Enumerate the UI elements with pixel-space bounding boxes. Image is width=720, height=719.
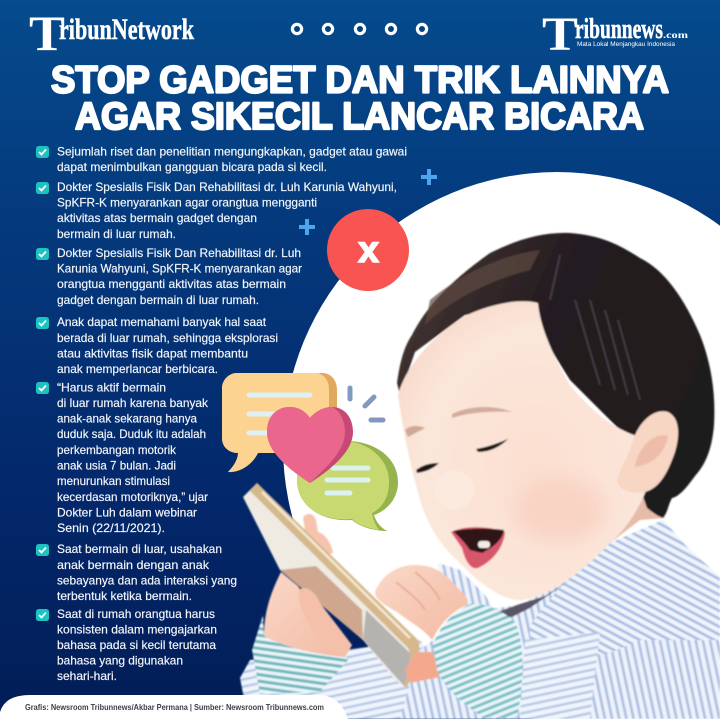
icon: chat bubbles and heart bbox=[222, 373, 398, 531]
bullet: di rumah: sehari-hari. bbox=[57, 669, 117, 683]
mouth lips bbox=[451, 527, 505, 568]
bullet: anak di luar rumah: atau aktivitas fisik dapat membantu bbox=[57, 346, 248, 360]
bullet: dokter spesialis 1: Dokter Spesialis Fisik Dan Rehabilitasi dr. Luh Karunia Wahyuni, bbox=[57, 180, 397, 194]
bullet: kutipan dokter: di luar rumah karena banyak bbox=[57, 396, 209, 410]
bullet: kutipan dokter bbox=[36, 380, 209, 535]
shirt body bbox=[400, 520, 720, 719]
bullet: dokter spesialis 2: Dokter Spesialis Fisik Dan Rehabilitasi dr. Luh bbox=[57, 246, 301, 260]
header dots bbox=[292, 24, 427, 34]
bullet: kutipan dokter: perkembangan motorik bbox=[57, 443, 177, 457]
logo: Tribun Network: T bbox=[29, 5, 65, 61]
orange chat bubble bbox=[222, 373, 337, 472]
bullet: bermain di luar: Saat bermain di luar, usahakan bbox=[57, 542, 222, 556]
right hand bbox=[375, 565, 468, 640]
phone edge highlight bbox=[262, 492, 410, 638]
bullet: dokter spesialis 2 bbox=[36, 246, 302, 307]
bullet: di rumah: bahasa pada si kecil terutama bbox=[57, 638, 216, 652]
logo: Tribunnews.com: ribunnews bbox=[575, 14, 663, 45]
logo: Tribun Network bbox=[29, 5, 194, 61]
bullet: dokter spesialis 1: SpKFR-K menyarankan agar orangtua mengganti bbox=[57, 196, 317, 210]
left sleeve bbox=[252, 615, 348, 694]
phone lower reflection bbox=[363, 610, 412, 687]
brow right bbox=[452, 407, 512, 418]
collar shadow bbox=[497, 580, 570, 617]
logo: Tribunnews.com bbox=[542, 8, 689, 61]
bullet: riset gadget: Sejumlah riset dan penelitian mengungkapkan, gadget atau gawai bbox=[57, 144, 407, 158]
bullet: di rumah: Saat di rumah orangtua harus bbox=[57, 607, 215, 621]
tooth bbox=[478, 541, 490, 548]
bullet: kutipan dokter: menurunkan stimulasi bbox=[57, 474, 170, 488]
lower white fill right of circle bbox=[560, 440, 720, 719]
bullet: dokter spesialis 1: aktivitas atas bermain gadget dengan bbox=[57, 211, 257, 225]
bullet: bermain di luar: terbentuk ketika bermain. bbox=[57, 589, 192, 603]
cheek blush bbox=[515, 478, 605, 542]
bullet: kutipan dokter: duduk saja. Duduk itu adalah bbox=[57, 427, 206, 441]
footer credit tab bbox=[0, 695, 348, 719]
baby photo illustration bbox=[240, 233, 720, 719]
bullet: di rumah: konsisten dalam mengajarkan bbox=[57, 622, 217, 636]
bullet: anak di luar rumah bbox=[36, 315, 278, 376]
brow left bbox=[405, 426, 425, 437]
logo: Tribunnews.com: Mata Lokal Menjangkau Indonesia bbox=[577, 41, 675, 48]
neck shadow bbox=[610, 490, 665, 543]
bullet: riset gadget bbox=[36, 144, 407, 174]
close badge: red circle with x: x bbox=[358, 229, 379, 270]
bullet: anak di luar rumah: Anak dapat memahami banyak hal saat bbox=[57, 315, 267, 329]
logo: Tribunnews.com: .com bbox=[663, 30, 689, 40]
thumb on phone bbox=[299, 588, 352, 657]
hair strands bbox=[550, 255, 640, 400]
bullet: riset gadget: dapat menimbulkan gangguan bicara pada si kecil. bbox=[57, 160, 327, 174]
bullet: dokter spesialis 2: orangtua mengganti aktivitas atas bermain bbox=[57, 277, 286, 291]
inner ear bbox=[635, 435, 668, 467]
bullet: kutipan dokter: Senin (22/11/2021). bbox=[57, 521, 165, 535]
title: AGAR SIKECIL LANCAR BICARA bbox=[75, 96, 644, 138]
icon: plus lower bbox=[299, 219, 315, 235]
hair highlight bbox=[425, 250, 540, 325]
hand holding phone bbox=[264, 572, 352, 657]
right sleeve bbox=[433, 603, 523, 718]
bullet: kutipan dokter: anak usia 7 bulan. Jadi bbox=[57, 458, 176, 472]
white circle behind baby bbox=[283, 172, 720, 719]
close badge: red circle with x bbox=[327, 209, 409, 291]
green chat bubble bbox=[297, 441, 398, 531]
bullet: dokter spesialis 2: gadget dengan bermain di luar rumah. bbox=[57, 293, 259, 307]
shirt lower folds bbox=[520, 632, 600, 719]
fingers under phone bbox=[405, 652, 440, 683]
shirt shoulder bbox=[530, 520, 720, 655]
finger creases bbox=[396, 572, 440, 610]
mouth interior bbox=[453, 529, 504, 553]
icon: plus upper bbox=[421, 169, 437, 185]
bullet: di rumah bbox=[36, 607, 217, 683]
bullet: bermain di luar: anak bermain dengan anak bbox=[57, 558, 210, 572]
bullet: dokter spesialis 1: bermain di luar rumah. bbox=[57, 227, 176, 241]
phone bbox=[243, 483, 419, 687]
left arm underlay bbox=[240, 640, 480, 719]
bullet: anak di luar rumah: anak memperlancar berbicara. bbox=[57, 362, 218, 376]
bullet: kutipan dokter: Dokter Luh dalam webinar bbox=[57, 506, 197, 520]
bullet: bermain di luar bbox=[36, 542, 237, 603]
logo: Tribunnews.com: T bbox=[542, 8, 578, 61]
spark ticks bbox=[350, 388, 383, 420]
shirt patch beside chin bbox=[438, 563, 497, 615]
bullet: bermain di luar: sebayanya dan ada interaksi yang bbox=[57, 574, 237, 588]
title bbox=[51, 60, 669, 138]
bullet: dokter spesialis 2: Karunia Wahyuni, SpKFR-K menyarankan agar bbox=[57, 262, 302, 276]
phone metallic edge bbox=[250, 483, 419, 687]
bullet: kutipan dokter: anak-anak sekarang hanya bbox=[57, 412, 197, 426]
hair back bbox=[397, 233, 714, 518]
logo: Tribun Network: ribunNetwork bbox=[59, 13, 194, 46]
eye left bbox=[416, 463, 439, 473]
ear bbox=[617, 411, 678, 493]
bullet: dokter spesialis 1 bbox=[36, 180, 397, 241]
bullet: di rumah: bahasa yang digunakan bbox=[57, 654, 183, 668]
eye right bbox=[476, 439, 508, 452]
nose bbox=[434, 471, 474, 509]
bullet: kutipan dokter: “Harus aktif bermain bbox=[57, 380, 166, 394]
footer credit tab: Grafis: Newsroom Tribunnews/Akbar Permana | Sumber: Newsroom Tribunnews.com bbox=[25, 702, 324, 712]
heart bbox=[267, 407, 353, 483]
bullet: kutipan dokter: kecerdasan motoriknya,” ujar bbox=[57, 490, 208, 504]
phone back bbox=[243, 483, 418, 687]
phone reflection of hand bbox=[280, 566, 363, 640]
fingers behind phone bbox=[303, 514, 333, 560]
title: STOP GADGET DAN TRIK LAINNYA bbox=[51, 60, 669, 102]
bullet: anak di luar rumah: berada di luar rumah, sehingga eksplorasi bbox=[57, 331, 278, 345]
face bbox=[398, 301, 650, 600]
